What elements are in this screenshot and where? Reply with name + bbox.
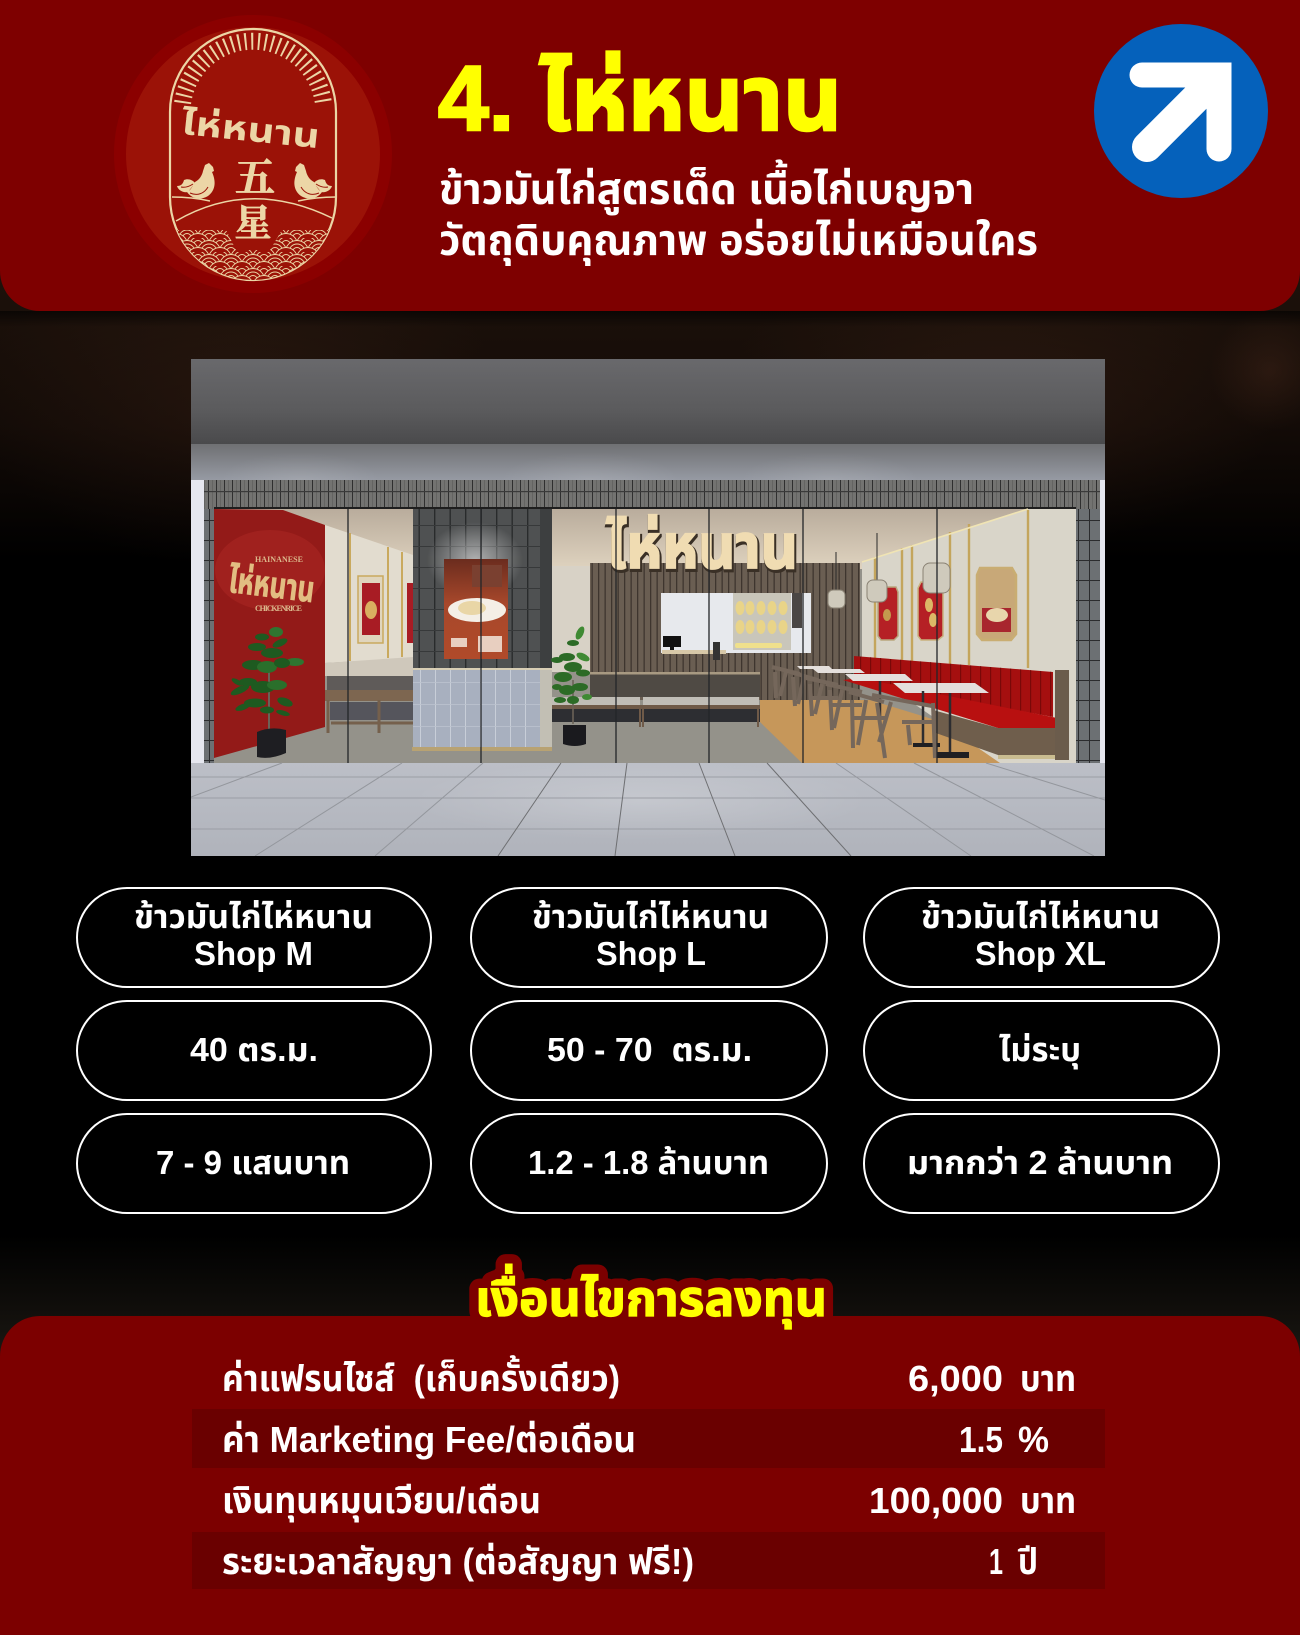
glass door lines xyxy=(348,509,937,763)
center plant xyxy=(551,625,592,746)
column: Shop XL: มากกว่า 2 ล้านบาท xyxy=(907,1144,1173,1181)
mall ceiling xyxy=(191,359,1105,444)
row: working capital xyxy=(222,1480,1076,1522)
logo badge: 星 xyxy=(234,193,272,247)
subtitle: ข้าวมันไก่สูตรเด็ด เนื้อไก่เบญจา xyxy=(439,159,974,215)
column: Shop M: ข้าวมันไก่ไห่หนาน xyxy=(134,898,373,935)
beam xyxy=(191,444,1105,480)
store sign: ไห่หนาน xyxy=(607,515,799,584)
column: Shop M: 7 - 9 แสนบาท xyxy=(156,1144,350,1181)
row: contract term: ปี xyxy=(1018,1541,1038,1582)
row: franchise fee: ค่าแฟรนไชส์ (เก็บครั้งเดียว) xyxy=(222,1354,620,1399)
column: Shop M: 40 ตร.ม. xyxy=(190,1031,318,1068)
subtitle xyxy=(439,159,1038,266)
wood floor xyxy=(760,700,1000,763)
column: Shop XL: ไม่ระบุ xyxy=(999,1031,1081,1070)
red banquette xyxy=(843,656,1069,760)
row: marketing fee xyxy=(192,1409,1105,1468)
logo badge: 五 xyxy=(235,146,275,203)
red brand wall: ไห่หนาน xyxy=(226,559,317,610)
back wood wall xyxy=(590,563,860,700)
row: contract term xyxy=(192,1532,1105,1589)
column: Shop L: 50 - 70 ตร.ม. xyxy=(547,1031,752,1068)
title: 4. ไห่หนาน xyxy=(438,48,842,150)
storefront photo illustration xyxy=(191,359,1105,856)
left room xyxy=(322,525,413,733)
investment panel xyxy=(0,1264,1300,1635)
tile fascia xyxy=(204,480,1100,509)
column: Shop M xyxy=(77,888,431,1213)
column: Shop L: 1.2 - 1.8 ล้านบาท xyxy=(528,1144,769,1181)
icon: left rooster xyxy=(177,163,215,199)
row: franchise fee: บาท xyxy=(1020,1358,1076,1399)
red brand wall: HAINANESE xyxy=(255,555,303,564)
row: contract term: 1 xyxy=(989,1541,1003,1582)
mall floor xyxy=(191,760,1105,856)
store sign: ไห่หนาน xyxy=(606,513,798,582)
row: working capital: 100,000 xyxy=(869,1480,1003,1521)
column: Shop L xyxy=(471,888,827,1213)
tiled counter xyxy=(412,668,552,751)
row: marketing fee: ค่า Marketing Fee/ต่อเดือน xyxy=(222,1419,636,1460)
red brand wall: CHICKENRICE xyxy=(255,604,302,613)
interior base xyxy=(214,569,932,763)
kitchen window xyxy=(661,593,811,660)
subtitle: วัตถุดิบคุณภาพ อร่อยไม่เหมือนใคร xyxy=(439,217,1038,266)
center counter and bench xyxy=(552,672,760,727)
row: marketing fee: % xyxy=(1018,1419,1049,1460)
header panel xyxy=(0,0,1300,311)
section heading: เงื่อนไขการลงทุน xyxy=(475,1264,827,1329)
row: franchise fee xyxy=(222,1354,1076,1399)
side columns xyxy=(191,480,1105,763)
row: franchise fee: 6,000 xyxy=(908,1358,1003,1399)
icon: right rooster xyxy=(294,163,332,199)
row: contract term: ระยะเวลาสัญญา (ต่อสัญญา ฟรี!) xyxy=(222,1541,694,1582)
menu board xyxy=(444,559,508,659)
interior ceiling xyxy=(214,509,1076,569)
column: Shop L: Shop L xyxy=(596,935,706,972)
column: Shop M: Shop M xyxy=(194,935,313,972)
logo badge xyxy=(114,15,392,293)
chairs xyxy=(772,667,935,758)
comparison pills xyxy=(77,888,1219,1213)
cream wall section xyxy=(552,566,590,672)
row: marketing fee: 1.5 xyxy=(959,1419,1003,1460)
tables xyxy=(797,666,989,758)
column: Shop XL xyxy=(864,888,1219,1213)
row: working capital: เงินทุนหมุนเวียน/เดือน xyxy=(222,1480,541,1522)
left plant xyxy=(229,627,304,758)
column: Shop XL: ข้าวมันไก่ไห่หนาน xyxy=(921,898,1160,935)
column: Shop XL: Shop XL xyxy=(975,935,1106,972)
right wall xyxy=(862,509,1076,763)
row: working capital: บาท xyxy=(1020,1480,1076,1521)
pillar xyxy=(413,509,552,668)
red brand wall xyxy=(214,509,325,758)
logo badge: ไห่หนาน xyxy=(179,104,322,156)
icon: blue arrow badge xyxy=(1094,24,1268,198)
column: Shop L: ข้าวมันไก่ไห่หนาน xyxy=(532,898,769,935)
pendant lamps xyxy=(828,533,950,608)
section heading: เงื่อนไขการลงทุน xyxy=(475,1264,827,1329)
